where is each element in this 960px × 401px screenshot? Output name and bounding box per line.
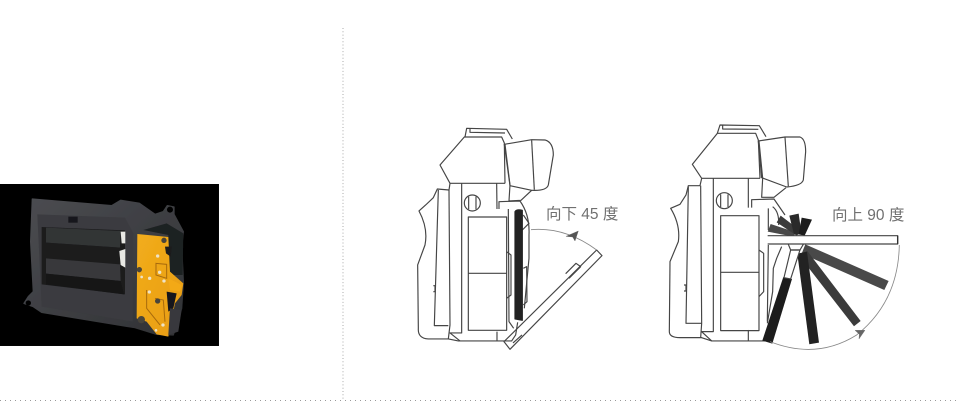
camera body outline (669, 125, 806, 341)
shutter opening (42, 227, 125, 294)
screen in intermediate white position (784, 250, 800, 279)
diagram: camera with screen tilted down 45 degrees (418, 128, 602, 349)
circuit details (147, 263, 167, 325)
label: tilt up 90 degrees: 向上 90 度 (832, 206, 904, 224)
dark mechanism (143, 223, 183, 275)
gold circuit board (137, 234, 183, 337)
rear LCD stowed (515, 210, 522, 320)
diagram: camera with screen tilted up 90 degrees (669, 125, 899, 349)
label: tilt down 45 degrees: 向下 45 度 (546, 205, 618, 223)
shutter frame (24, 199, 183, 335)
shutter blades (46, 228, 121, 248)
inner frame recess (37, 214, 133, 322)
white highlights (121, 232, 125, 243)
screws (137, 238, 167, 323)
camera body outline (418, 128, 553, 341)
screen horizontal at 90 degrees (768, 236, 898, 244)
rotation arc arrow (770, 245, 899, 349)
tilted screen (504, 250, 602, 349)
mount holes (167, 207, 173, 213)
screen positions: fan of tilted screens (762, 214, 889, 344)
rotation arc arrow (531, 229, 597, 250)
photo: shutter unit on black background (0, 184, 219, 346)
